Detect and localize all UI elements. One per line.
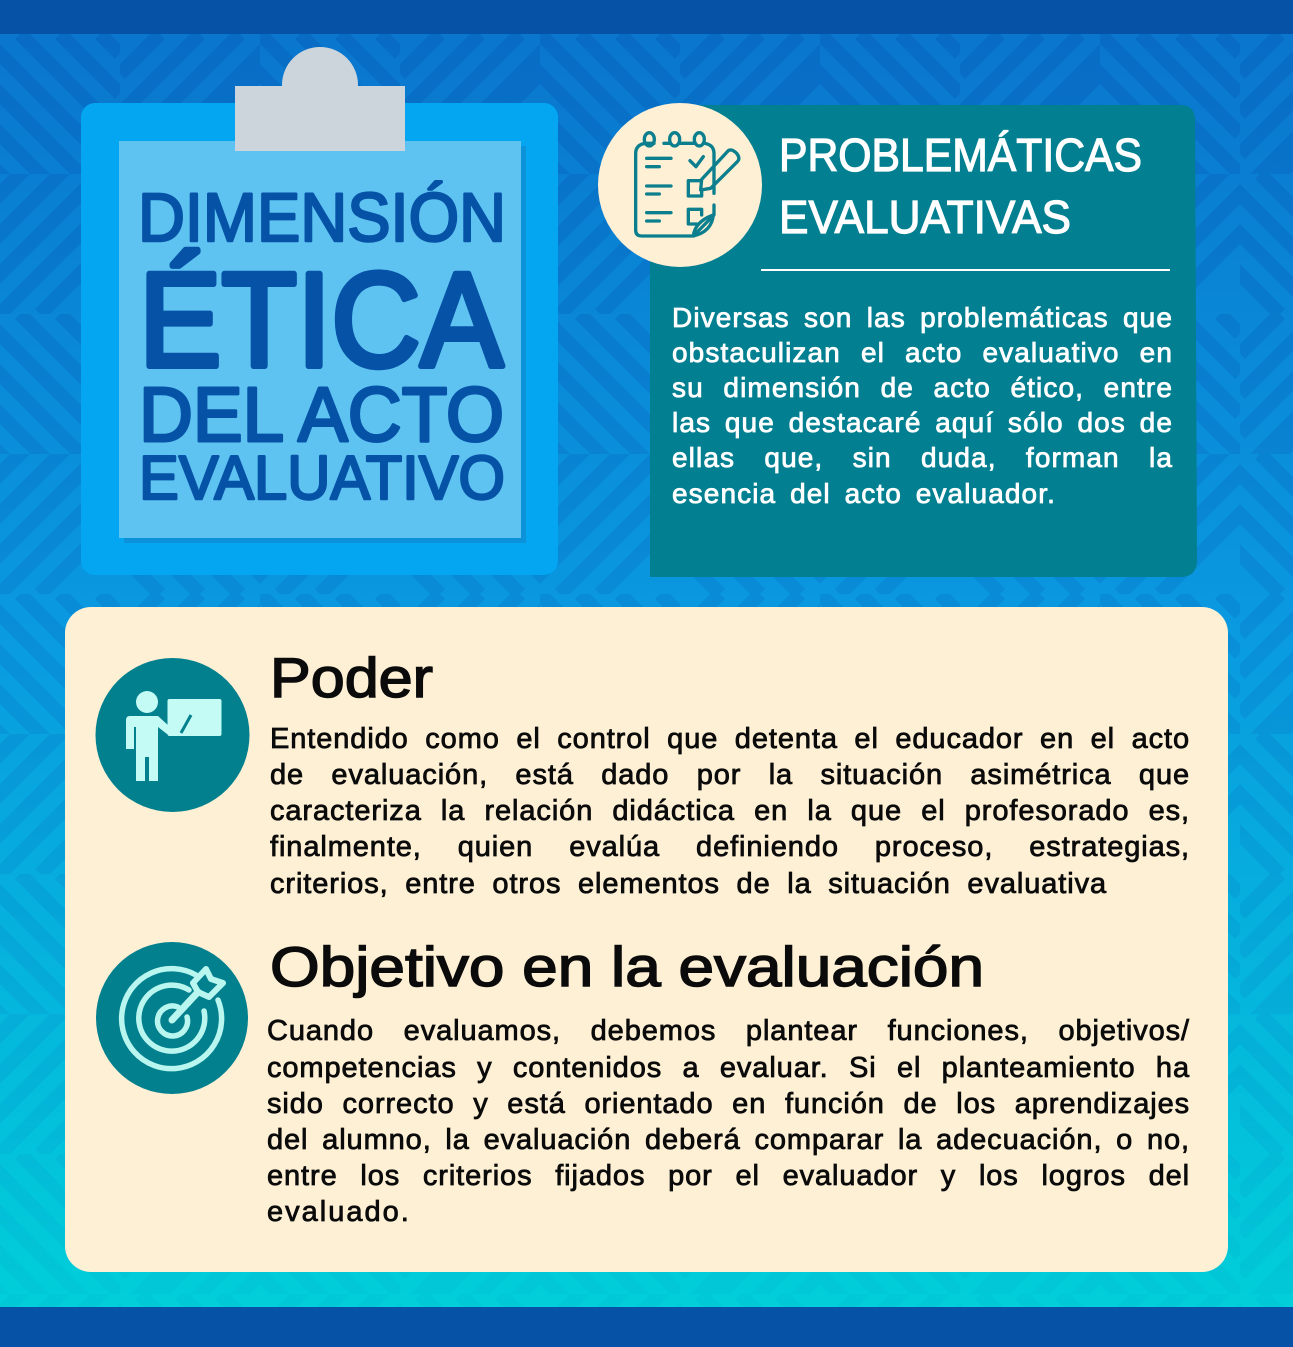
text: poder: de evaluación, está dado por la situación asimétrica que	[270, 759, 1190, 791]
text: problemáticas intro	[672, 302, 1173, 509]
text: poder	[270, 723, 1190, 900]
text: objetivo: entre los criterios fijados por el evaluador y los logros del	[267, 1160, 1190, 1192]
text: objetivo: evaluado.	[267, 1196, 411, 1228]
heading: problemáticas evaluativas: EVALUATIVAS	[779, 191, 1071, 243]
title	[138, 179, 506, 513]
text: poder: finalmente, quien evalúa definiendo proceso, estrategias,	[270, 831, 1190, 863]
panel: problemáticas evaluativas	[650, 105, 1197, 577]
text: poder: criterios, entre otros elementos de la situación evaluativa	[270, 868, 1107, 900]
icon: checklist	[598, 103, 762, 267]
bottom band	[0, 1307, 1293, 1347]
heading underline	[761, 269, 1170, 271]
text: problemáticas intro: su dimensión de acto ético, entre	[672, 372, 1173, 403]
text: objetivo: Cuando evaluamos, debemos plantear funciones, objetivos/	[267, 1015, 1190, 1047]
text: problemáticas intro: esencia del acto evaluador.	[672, 478, 1056, 509]
heading: problemáticas evaluativas	[779, 129, 1142, 243]
title: ÉTICA	[139, 246, 504, 395]
panel: contenido	[65, 607, 1228, 1272]
text: objetivo: del alumno, la evaluación deberá comparar la adecuación, o no,	[267, 1124, 1190, 1156]
title: DEL ACTO	[139, 372, 504, 458]
text: problemáticas intro: Diversas son las problemáticas que	[672, 302, 1173, 333]
heading: poder: Poder	[270, 646, 433, 709]
text: problemáticas intro: las que destacaré aquí sólo dos de	[672, 407, 1173, 438]
top band	[0, 0, 1293, 34]
icon: presenter	[96, 658, 250, 812]
heading: problemáticas evaluativas: PROBLEMÁTICAS	[779, 129, 1142, 181]
text: objetivo: sido correcto y está orientado en función de los aprendizajes	[267, 1088, 1190, 1120]
text: problemáticas intro: ellas que, sin duda, forman la	[672, 442, 1173, 473]
icon: target	[96, 942, 248, 1094]
text: poder: caracteriza la relación didáctica en la que el profesorado es,	[270, 795, 1190, 827]
title: EVALUATIVO	[139, 444, 505, 513]
clipboard	[81, 47, 558, 575]
title: DIMENSIÓN	[138, 179, 506, 256]
heading: objetivo: Objetivo en la evaluación	[270, 935, 984, 998]
text: objetivo: competencias y contenidos a evaluar. Si el planteamiento ha	[267, 1052, 1190, 1084]
text: problemáticas intro: obstaculizan el acto evaluativo en	[672, 337, 1173, 368]
text: objetivo	[267, 1015, 1190, 1228]
text: poder: Entendido como el control que detenta el educador en el acto	[270, 723, 1190, 755]
